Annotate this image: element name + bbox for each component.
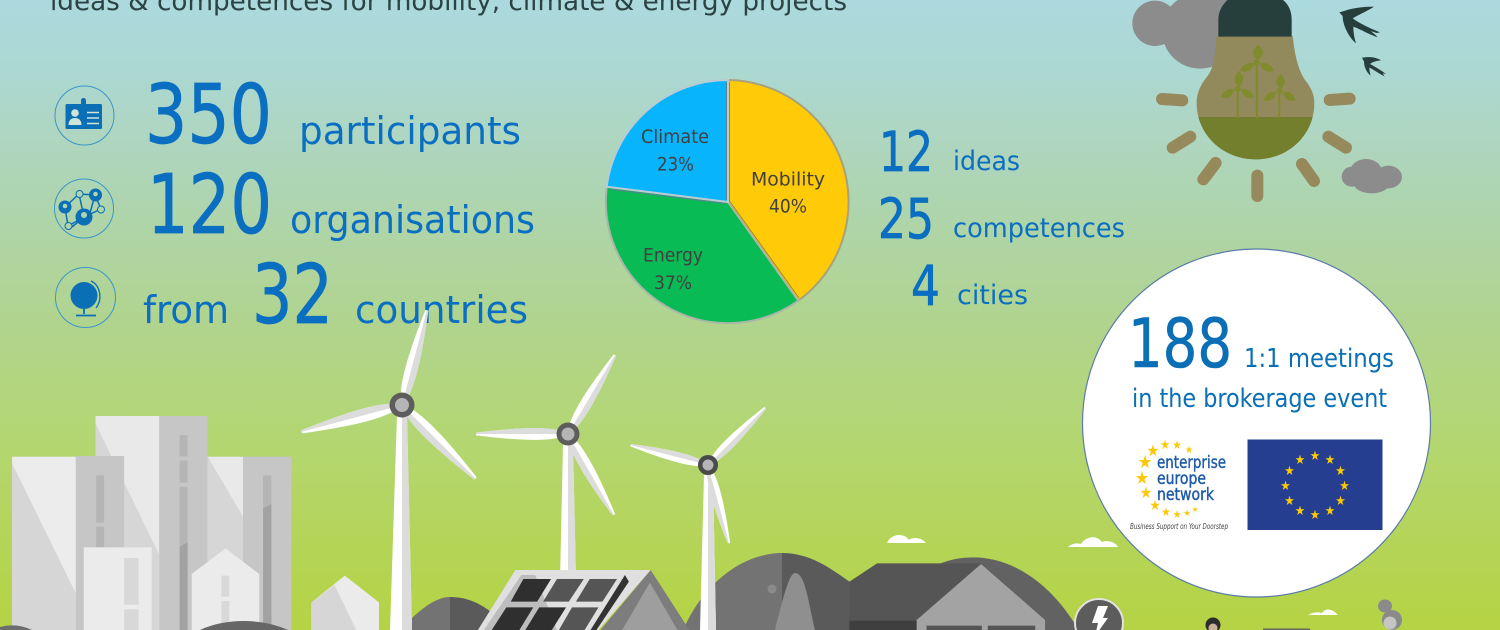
stat: from 32 countries: from: [143, 288, 229, 332]
logo: EU flag: ★: [1284, 464, 1295, 479]
pie label: energy: Energy: [643, 244, 703, 266]
logo: enterprise europe network: ★: [1138, 452, 1152, 473]
logo: EU flag: ★: [1295, 453, 1305, 468]
icon: participant badge: [55, 86, 114, 145]
right tower: [208, 457, 291, 630]
stat: 25 competences: [878, 187, 1125, 251]
logo: EU flag: ★: [1335, 464, 1346, 479]
pie slice: climate 23%: [607, 80, 728, 202]
stat: 350 participants: 350: [145, 68, 272, 163]
logo: enterprise europe network: ★: [1135, 468, 1149, 489]
illustration: light bulb with wind turbines: [1132, 0, 1402, 196]
logo: enterprise europe network: ★: [1140, 483, 1152, 502]
illustration: farm house with dark barn: [849, 557, 1079, 630]
icon: lightning charge badge: [1075, 599, 1123, 630]
icon: organisation network: [54, 179, 114, 238]
logo: enterprise europe network: ★: [1185, 445, 1193, 456]
white clouds: [887, 535, 1338, 615]
pie label: mobility: Mobility: [751, 168, 825, 190]
small turbines in bulb: [1221, 45, 1296, 118]
logo: EU flag: ★: [1284, 494, 1295, 509]
pie label: energy: [643, 244, 703, 294]
pentagon house: [192, 548, 259, 630]
stat: 188 meetings: [1128, 305, 1394, 414]
wind turbine 2: [476, 352, 620, 580]
stat: from 32 countries: [143, 248, 528, 343]
logo: EU flag: ★: [1339, 479, 1350, 494]
stat: 4 cities: [911, 254, 1028, 318]
bulb cap: [1218, 0, 1292, 37]
logo: enterprise europe network: enterprise: [1157, 453, 1226, 473]
stat: 25 competences: 25: [878, 187, 934, 251]
stat: 12 ideas: [879, 120, 1020, 184]
logo: enterprise europe network: ★: [1147, 441, 1159, 460]
wind turbine 3: [629, 404, 769, 630]
stat: 188 meetings: 188: [1128, 305, 1232, 384]
bulb ground: [1198, 117, 1313, 160]
small house: [311, 576, 379, 630]
pie label: mobility: [751, 168, 825, 218]
logo: enterprise europe network: network: [1157, 485, 1214, 505]
icon: swallow large: [1339, 7, 1380, 43]
logo: enterprise europe network: Business Support on Your Doorstep: [1130, 522, 1228, 531]
stat: 188 meetings: in the brokerage event: [1132, 384, 1387, 414]
logo: enterprise europe network: ★: [1192, 505, 1198, 514]
stat: 4 cities: 4: [911, 254, 940, 318]
icon: globe: [56, 268, 116, 328]
illustration: city skyline: [12, 416, 379, 630]
logo: enterprise europe network: [1130, 438, 1228, 531]
logo: enterprise europe network: ★: [1183, 509, 1191, 519]
logo: EU flag: ★: [1335, 494, 1346, 509]
stat: 120 organisations: [147, 158, 535, 253]
pie label: climate: 23%: [657, 154, 694, 176]
pie chart: [606, 80, 849, 323]
stat: 4 cities: cities: [957, 280, 1028, 311]
grey cloud lower right: [1342, 159, 1402, 193]
stat: 188 meetings: 1:1 meetings: [1244, 344, 1394, 374]
wind turbine 1: [300, 309, 480, 630]
illustration: house with solar panels: [478, 570, 689, 630]
stat: 120 organisations: organisations: [290, 198, 535, 242]
stat: 12 ideas: 12: [879, 120, 933, 184]
stat: 350 participants: [145, 68, 521, 163]
logo: EU flag: ★: [1325, 504, 1335, 519]
pie slice: energy 37%: [606, 187, 798, 323]
pie label: climate: [641, 126, 709, 176]
pie label: mobility: 40%: [769, 196, 807, 218]
logo: EU flag: ★: [1280, 479, 1291, 494]
callout: brokerage meetings circle: [1082, 249, 1430, 597]
stat: from 32 countries: countries: [355, 288, 528, 332]
pie label: energy: 37%: [654, 272, 692, 294]
logo: EU flag: [1248, 440, 1382, 530]
left tower: [12, 456, 124, 630]
pie slice: mobility 40%: [728, 80, 849, 301]
stat: 12 ideas: ideas: [953, 146, 1020, 177]
illustration: grey hills: [0, 553, 850, 630]
bulb light rays: [1162, 99, 1350, 196]
logo: EU flag: ★: [1295, 504, 1305, 519]
logo: enterprise europe network: ★: [1173, 508, 1182, 521]
bulb glass: [1197, 36, 1314, 159]
icon: swallow small: [1362, 57, 1386, 76]
front house: [84, 547, 152, 630]
stat: 350 participants: participants: [299, 109, 521, 153]
logo: EU flag: ★: [1310, 508, 1320, 523]
logo: enterprise europe network: ★: [1161, 505, 1171, 519]
logo: enterprise europe network: europe: [1157, 469, 1206, 489]
stat: 120 organisations: 120: [147, 158, 272, 253]
logo: enterprise europe network: ★: [1149, 498, 1161, 514]
logo: EU flag: ★: [1325, 453, 1335, 468]
stat: from 32 countries: 32: [252, 248, 333, 343]
pie label: climate: Climate: [641, 126, 709, 148]
stat: 25 competences: competences: [953, 213, 1125, 244]
back tower: [96, 416, 208, 630]
logo: EU flag: ★: [1310, 449, 1320, 464]
logo: enterprise europe network: ★: [1172, 438, 1182, 452]
people at bottom edge: [1206, 600, 1402, 630]
grey cloud behind bulb: [1132, 0, 1238, 69]
logo: enterprise europe network: ★: [1160, 438, 1170, 453]
